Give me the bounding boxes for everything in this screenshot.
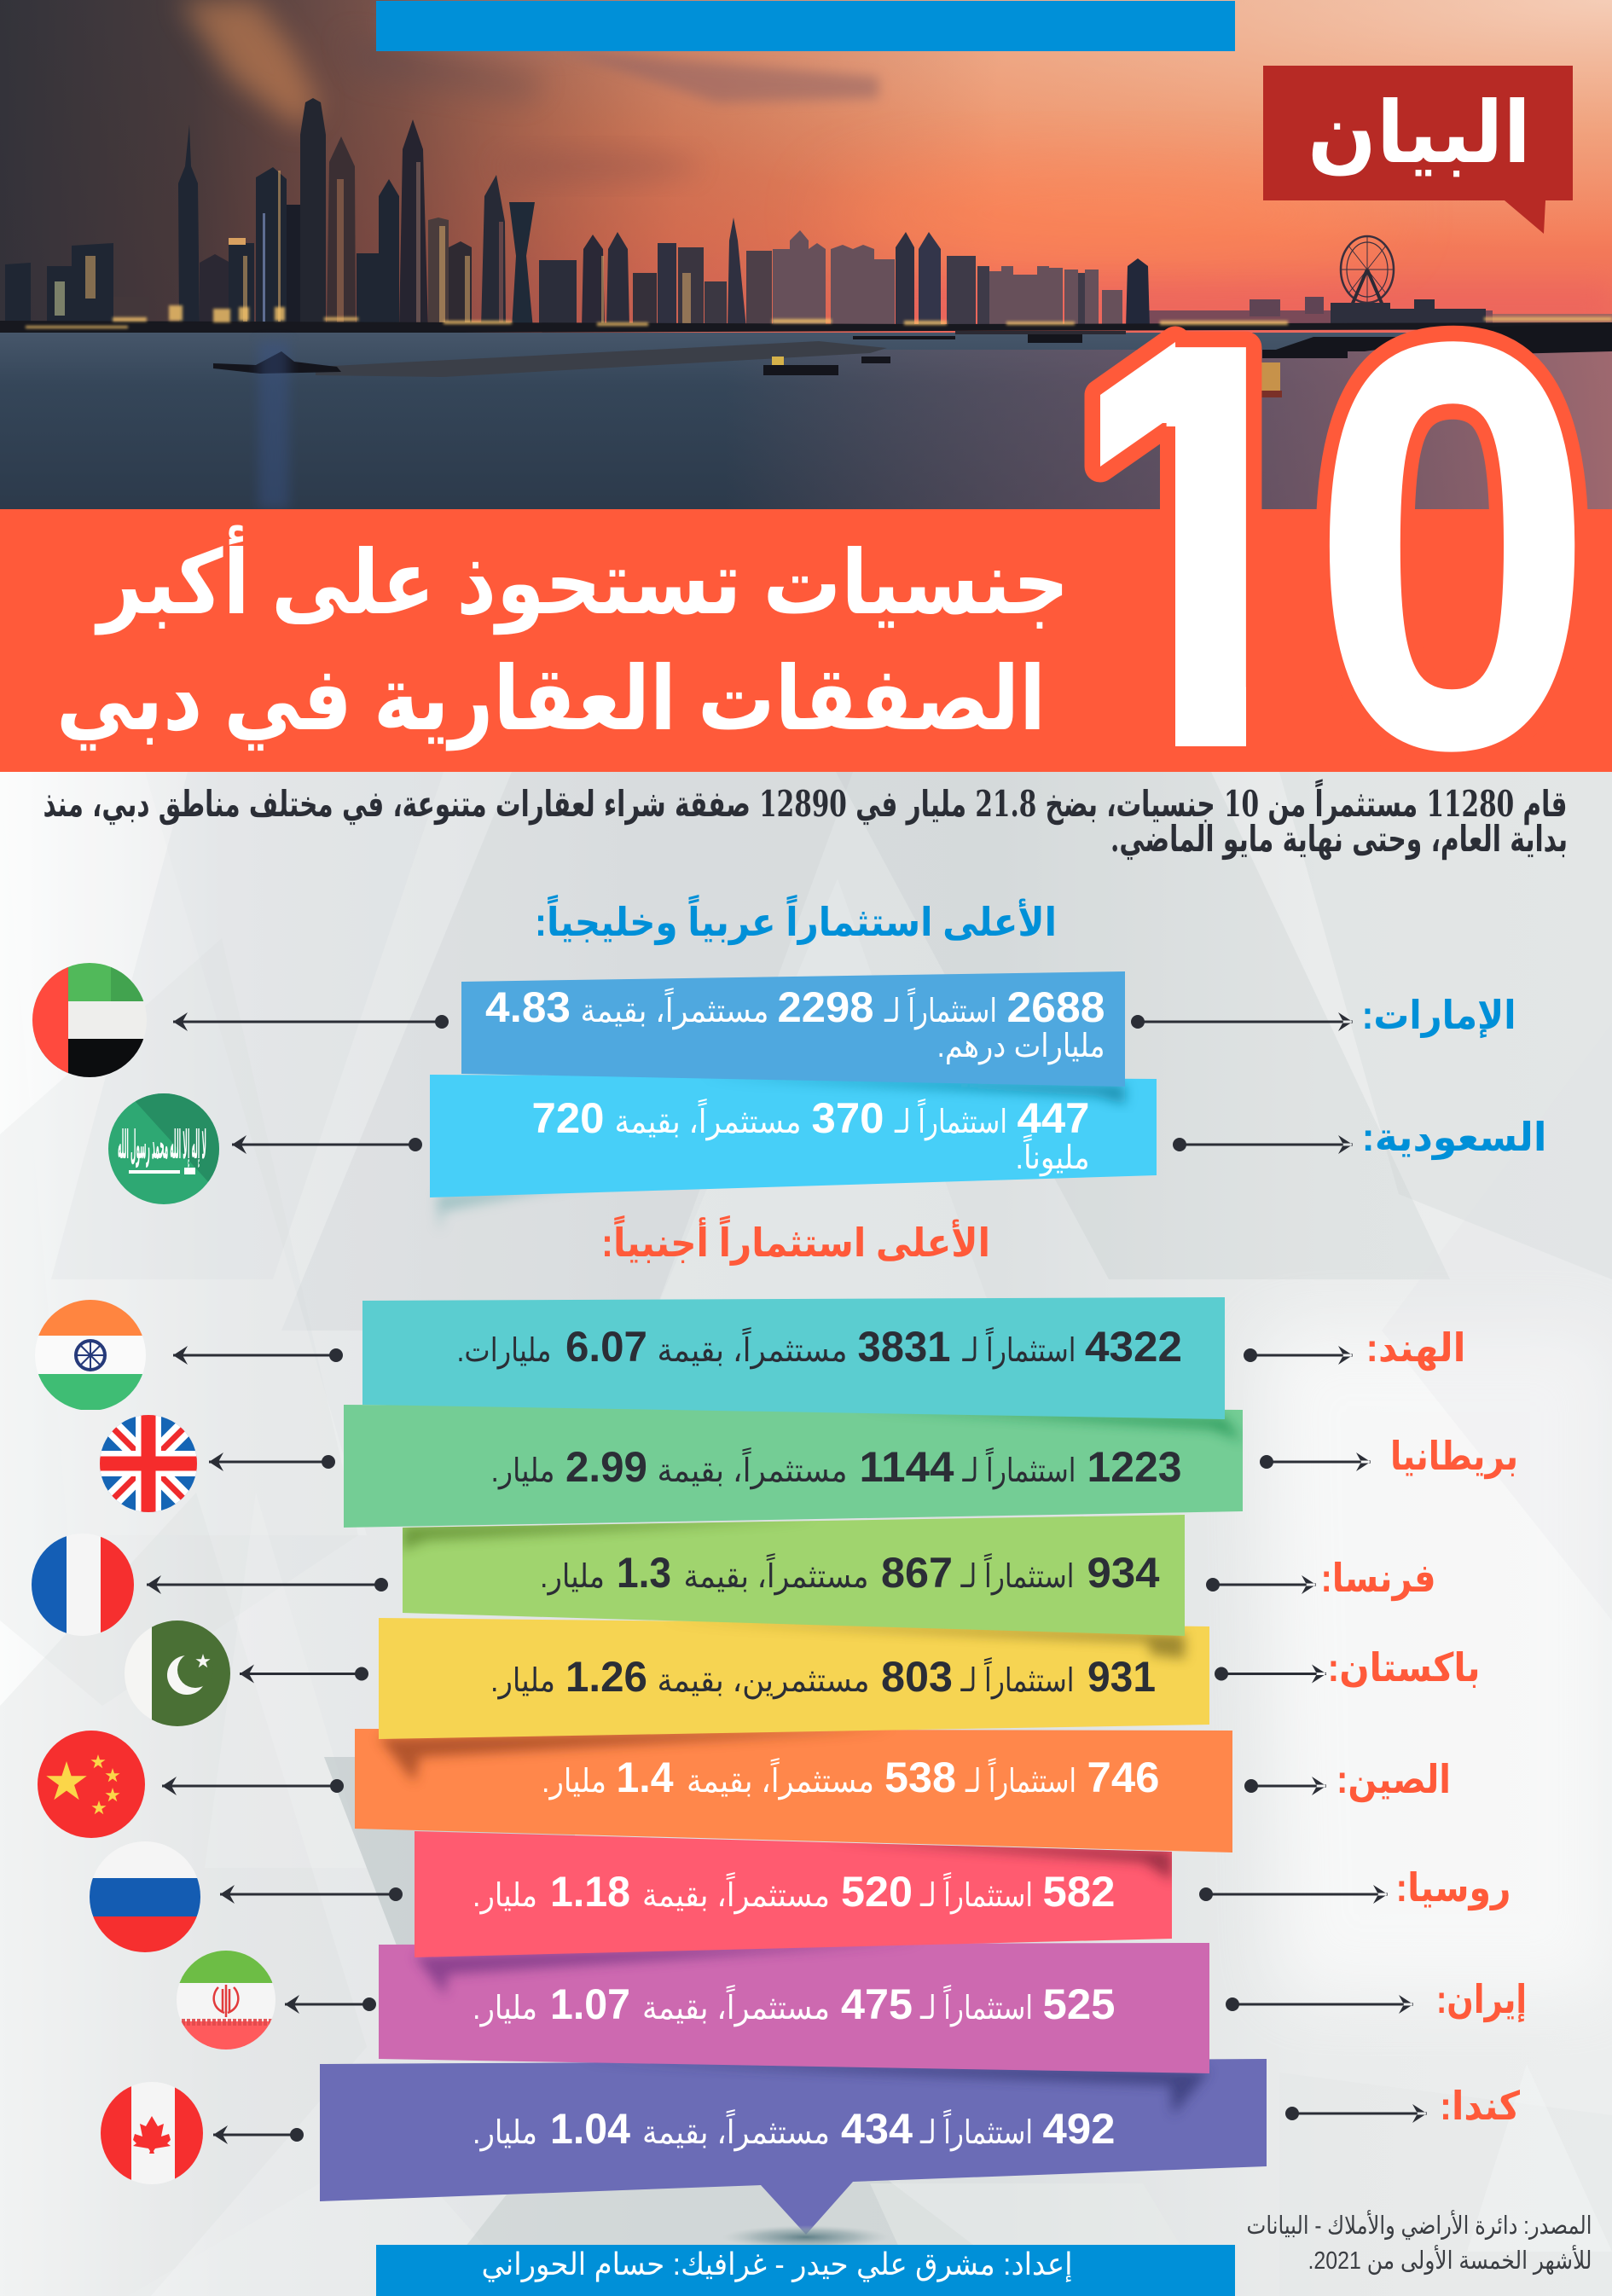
card: Britain: مستثمراً، بقيمة [657,1447,848,1490]
country labels: فرنسا: [1320,1556,1436,1601]
background: geometric facets [0,772,1612,2296]
card: France: 1.3 [617,1549,671,1597]
shore lights [26,305,1612,328]
big number 10 [1031,222,1596,870]
card: Britain: مليار. [491,1453,554,1489]
title [56,525,1070,751]
flag: Iran [177,1951,275,2050]
top blue bar [376,1,1235,51]
card: Britain: 1144 [860,1443,954,1491]
card: India: مستثمراً، بقيمة [657,1327,848,1370]
card: China: استثماراً لـ [965,1758,1076,1800]
card: India: مليارات. [457,1333,551,1369]
blue reflection [258,341,289,509]
card: UAE: 2688 [1006,983,1105,1031]
card: Pakistan: مليار. [490,1663,555,1699]
photo: Dubai Marina skyline at dusk [0,0,1612,509]
flag: UAE [32,963,148,1078]
mid distance towers [773,230,1122,326]
country labels [1320,993,1547,2128]
card: UAE: استثماراً لـ [884,988,997,1029]
card: Canada: استثماراً لـ [919,2109,1033,2151]
island and boats [213,322,1612,397]
card: Pakistan: 803 [881,1653,953,1701]
flag: India [35,1300,146,1410]
shore land strip [0,321,1612,334]
card: France: مستثمراً، بقيمة [684,1553,868,1596]
heading: foreign: الأعلى استثماراً أجنبياً: [601,1215,990,1266]
card: China: 1.4 [616,1754,674,1801]
card: India: استثماراً لـ [962,1327,1076,1369]
source note [1247,2209,1592,2275]
card: Iran: 475 [841,1980,913,2028]
country labels: إيران: [1436,1977,1527,2023]
flag: Britain [99,1414,198,1513]
flag: Saudi Arabia [108,1093,219,1204]
card: Saudi Arabia: استثماراً لـ [894,1099,1007,1140]
card: Iran: استثماراً لـ [919,1985,1033,2026]
card: Iran: مليار. [473,1991,537,2026]
card: Britain: 2.99 [565,1443,647,1491]
card: China: 746 [1087,1754,1160,1801]
card: Iran [379,1941,1209,2073]
card: Canada [320,2059,1267,2235]
card: Pakistan: 1.26 [565,1653,647,1701]
country labels: الإمارات: [1361,993,1516,1038]
bottom credits bar: إعداد: مشرق علي حيدر - غرافيك: حسام الحوراني [481,2247,1073,2282]
card: Russia: مليار. [473,1878,537,1914]
card: Saudi Arabia: 447 [1017,1094,1090,1142]
card: France [403,1515,1185,1636]
card: Iran: 525 [1042,1980,1116,2028]
big number 10: 1 [1031,222,1354,870]
title: جنسيات تستحوذ على أكبر [94,525,1070,635]
card: Canada: مليار. [473,2115,537,2151]
card: UAE: 2298 [778,983,873,1031]
flag: China [38,1731,146,1838]
card: Russia: استثماراً لـ [919,1872,1033,1914]
card: Pakistan: مستثمرين، بقيمة [657,1663,870,1700]
logo: Al Bayan [1263,66,1573,234]
card: Russia: مستثمراً، بقيمة [642,1872,830,1915]
tower window lights [55,162,691,324]
card: Canada: 492 [1042,2105,1116,2153]
water [0,333,1612,509]
card: China: 538 [884,1754,956,1801]
flag: Canada [101,2082,205,2184]
card: Saudi Arabia: 720 [532,1094,604,1142]
card: Saudi Arabia: 370 [812,1094,884,1142]
flag: France [32,1534,135,1636]
card: Russia: 582 [1042,1868,1116,1916]
country labels: الهند: [1366,1325,1465,1371]
card: Russia: 520 [841,1868,913,1916]
bottom credits bar [376,2245,1235,2296]
card: Britain: استثماراً لـ [962,1447,1076,1489]
flag: Russia [90,1841,200,1952]
flag: Pakistan [125,1621,230,1726]
title: الصفقات العقارية في دبي [56,650,1046,751]
card: UAE: 4.83 [485,983,571,1031]
card: France: 867 [881,1549,953,1597]
card: Russia: 1.18 [550,1868,630,1916]
card: France: مليار. [540,1559,605,1595]
country labels: بريطانيا [1390,1434,1518,1479]
card: China: مستثمراً، بقيمة [687,1758,874,1800]
far lower skyline right [1143,297,1612,326]
card: China [355,1729,1232,1852]
card: UAE: مليارات درهم. [936,1029,1105,1064]
country labels: الصين: [1337,1757,1451,1802]
card: Canada: مستثمراً، بقيمة [642,2109,830,2152]
card: China: مليار. [542,1764,606,1800]
country labels: السعودية: [1361,1115,1547,1160]
card: France: 934 [1087,1549,1160,1597]
card: Canada: 1.04 [550,2105,630,2153]
card: Pakistan [379,1618,1209,1739]
card: Saudi Arabia [430,1075,1157,1232]
card: Britain: 1223 [1087,1443,1182,1491]
card: India: 4322 [1085,1323,1182,1371]
card: India: 3831 [858,1323,950,1371]
sky [0,0,1612,333]
card: India: 6.07 [565,1323,647,1371]
logo: Al Bayan: البيان [1308,85,1531,181]
ferris base buildings [1331,299,1486,323]
tail shadow ellipse [722,2225,890,2249]
card: UAE [461,971,1125,1087]
heading: Arab and Gulf: الأعلى استثماراً عربياً وخليجياً: [535,895,1057,945]
connector arrows [147,1012,1427,2144]
card: Iran: مستثمراً، بقيمة [642,1985,830,2027]
near towers [5,98,1150,328]
country labels: باكستان: [1327,1645,1481,1690]
card: Pakistan: 931 [1087,1653,1156,1701]
country labels: روسيا: [1395,1865,1511,1910]
card: Britain [344,1405,1243,1528]
card: Saudi Arabia: مستثمراً، بقيمة [614,1099,802,1141]
intro paragraph [43,779,1568,861]
card: Pakistan: استثماراً لـ [960,1657,1075,1699]
card: Canada: 434 [841,2105,913,2153]
card: UAE: مستثمراً، بقيمة [580,988,769,1030]
card: India [362,1297,1225,1419]
text: لا إله إلا الله محمد رسول الله [118,1122,206,1168]
card: France: استثماراً لـ [960,1553,1075,1595]
country labels: كندا: [1440,2084,1520,2128]
intro paragraph: قام 11280 مستثمراً من 10 جنسيات، بضخ 21.8 مليار في 12890 صفقة شراء لعقارات متنوعة، في مختلف مناطق دبي، منذ [43,779,1568,826]
card: Russia [415,1831,1172,1957]
ferris wheel [1339,235,1395,303]
card: Saudi Arabia: مليوناً. [1015,1134,1090,1177]
orange title band [0,509,1612,772]
card: Iran: 1.07 [550,1980,630,2028]
